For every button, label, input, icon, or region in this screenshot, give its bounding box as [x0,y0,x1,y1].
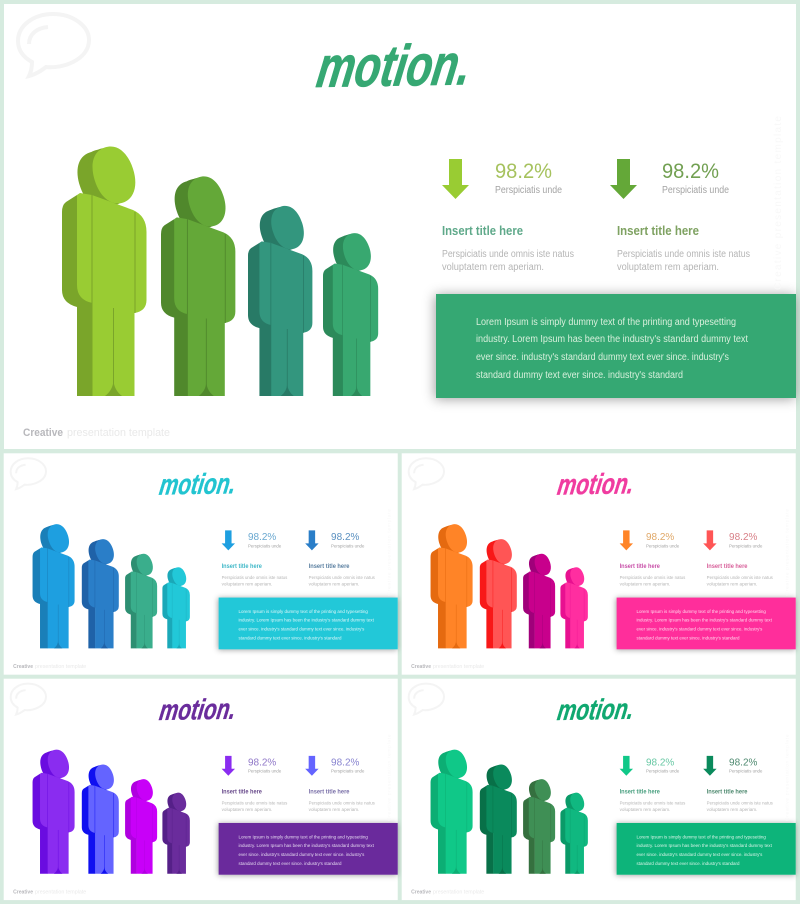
callout box: ever since. industry's standard dummy text ever since. industry's [476,352,729,363]
people figures [431,522,588,648]
vertical faint label: Creative presentation template [784,734,790,821]
stat 2: 98.2% [729,757,757,768]
icon: speech bubble [11,458,46,489]
footer [13,664,86,670]
callout box: industry. Lorem Ipsum has been the industry's standard dummy text [239,843,374,849]
text block 1: voluptatem rem aperiam. [222,582,272,588]
stat 1: Perspiciatis unde [646,543,680,549]
text block 2 [707,789,773,813]
stat 2: Perspiciatis unde [331,769,365,775]
footer: Creative [411,664,431,670]
text block 1: Perspiciatis unde omnis iste natus [620,801,686,807]
arrow 1 [222,530,235,550]
text block 2: Perspiciatis unde omnis iste natus [707,575,773,581]
panel: blue slide [4,453,398,675]
callout box [617,823,796,875]
footer: presentation template [433,664,484,670]
stat 2: Perspiciatis unde [729,543,763,549]
panel: pink and orange slide [402,453,796,675]
text block 2 [309,563,375,588]
text block 2: Perspiciatis unde omnis iste natus [309,575,375,581]
title: motion. [555,468,636,502]
text block 1: Perspiciatis unde omnis iste natus [222,801,288,807]
stat 2: 98.2% [331,757,359,768]
callout box: standard dummy text ever since. industry's standard [637,861,740,867]
stat 2: Perspiciatis unde [662,185,729,196]
callout box: ever since. industry's standard dummy text ever since. industry's [637,852,763,858]
callout box: standard dummy text ever since. industry's standard [239,635,342,641]
text block 2: Insert title here [707,563,748,570]
arrow 1 [442,159,469,199]
stat 2: Perspiciatis unde [331,543,365,549]
callout box [219,598,398,649]
text block 2 [309,789,375,813]
title: motion. [157,468,238,502]
stat 2: 98.2% [662,160,719,183]
stat 1 [248,532,282,549]
text block 1: Insert title here [222,563,262,570]
text block 1: Perspiciatis unde omnis iste natus [222,575,288,581]
footer [411,664,484,670]
arrow 2 [703,530,717,550]
callout box: industry. Lorem Ipsum has been the industry's standard dummy text [476,334,748,345]
stat 1: 98.2% [248,757,276,768]
callout box: industry. Lorem Ipsum has been the industry's standard dummy text [637,617,772,623]
text block 1: Insert title here [620,789,660,796]
callout box: Lorem Ipsum is simply dummy text of the printing and typesetting [239,834,368,840]
figure 4 [323,230,378,396]
footer [411,890,484,896]
callout box: standard dummy text ever since. industry's standard [476,370,683,381]
callout box: industry. Lorem Ipsum has been the industry's standard dummy text [239,617,374,623]
text block 2: voluptatem rem aperiam. [617,262,719,273]
stat 1: Perspiciatis unde [495,185,562,196]
people figures [431,747,588,874]
figure 1 [62,141,146,396]
arrow 1 [222,756,235,776]
vertical faint label: Creative presentation template [784,509,790,596]
text block 2: Perspiciatis unde omnis iste natus [309,801,375,807]
stat 1 [646,757,680,775]
text block 2: voluptatem rem aperiam. [707,807,757,813]
text block 1 [620,563,686,588]
arrow 1 [620,530,633,550]
icon: speech bubble [18,14,89,76]
stat 1: Perspiciatis unde [248,769,282,775]
callout box [617,598,796,649]
stat 2 [331,757,365,775]
stat 1: Perspiciatis unde [646,769,680,775]
stat 1: 98.2% [646,757,674,768]
callout box: standard dummy text ever since. industry's standard [637,635,740,641]
text block 2: voluptatem rem aperiam. [309,582,359,588]
callout box [219,823,398,875]
footer: presentation template [35,664,86,670]
people figures [33,747,190,874]
vertical faint label: Creative presentation template [386,509,392,596]
text block 2 [707,563,773,588]
stat 2 [331,532,365,549]
stat 1 [646,532,680,549]
title: motion. [157,694,238,727]
people figures [33,522,190,648]
callout box: Lorem Ipsum is simply dummy text of the printing and typesetting [476,317,736,328]
text block 1 [222,789,288,813]
text block 2: voluptatem rem aperiam. [309,807,359,813]
footer: Creative [13,664,33,670]
text block 2: voluptatem rem aperiam. [707,582,757,588]
text block 1: Perspiciatis unde omnis iste natus [620,575,686,581]
text block 1: Insert title here [442,223,523,238]
footer [13,890,86,896]
arrow 2 [610,159,637,199]
text block 1: Perspiciatis unde omnis iste natus [442,249,574,260]
footer: Creative [411,890,431,896]
text block 1 [442,223,574,273]
callout box: ever since. industry's standard dummy text ever since. industry's [239,852,365,858]
callout box [436,294,796,398]
arrow 2 [703,756,717,776]
panel: purple slide [4,679,398,900]
stat 2 [729,532,763,549]
text block 1: voluptatem rem aperiam. [442,262,544,273]
callout box: Lorem Ipsum is simply dummy text of the printing and typesetting [239,609,368,615]
footer: presentation template [67,427,170,439]
text block 1: Insert title here [620,563,660,570]
callout box: Lorem Ipsum is simply dummy text of the printing and typesetting [637,609,766,615]
stat 2: Perspiciatis unde [729,769,763,775]
footer [23,427,170,439]
vertical faint label: Creative presentation template [386,734,392,821]
title: motion. [313,33,476,100]
icon: speech bubble [11,684,46,715]
text block 1: voluptatem rem aperiam. [620,807,670,813]
arrow 2 [305,756,319,776]
vertical faint label: Creative presentation template [773,115,784,290]
arrow 1 [620,756,633,776]
stat 1: 98.2% [248,532,276,543]
stat 1: Perspiciatis unde [248,543,282,549]
callout box: ever since. industry's standard dummy text ever since. industry's [637,626,763,632]
callout box: industry. Lorem Ipsum has been the industry's standard dummy text [637,843,772,849]
panel: emerald slide [402,679,796,900]
callout box: Lorem Ipsum is simply dummy text of the printing and typesetting [637,834,766,840]
stat 2: 98.2% [331,532,359,543]
text block 2: Insert title here [617,223,699,238]
stat 1 [248,757,282,775]
stat 1 [495,160,562,196]
people figures [62,141,378,396]
text block 1: voluptatem rem aperiam. [222,807,272,813]
text block 1: voluptatem rem aperiam. [620,582,670,588]
text block 2 [617,223,750,273]
text block 2: Insert title here [707,789,748,796]
text block 2: Perspiciatis unde omnis iste natus [617,249,750,260]
stat 2: 98.2% [729,532,757,543]
footer: Creative [23,427,63,439]
title: motion. [555,694,636,727]
figure 2 [161,172,235,396]
panel: large green slide [4,4,796,449]
stat 1: 98.2% [495,160,552,183]
figure 3 [248,202,312,396]
text block 2: Perspiciatis unde omnis iste natus [707,801,773,807]
text block 2: Insert title here [309,789,350,796]
text block 1 [620,789,686,813]
text block 1: Insert title here [222,789,262,796]
icon: speech bubble [409,684,444,715]
callout box: standard dummy text ever since. industry's standard [239,861,342,867]
stat 2 [729,757,763,775]
stat 2 [662,160,729,196]
stat 1: 98.2% [646,532,674,543]
arrow 2 [305,530,319,550]
callout box: ever since. industry's standard dummy text ever since. industry's [239,626,365,632]
text block 2: Insert title here [309,563,350,570]
text block 1 [222,563,288,588]
footer: presentation template [433,890,484,896]
icon: speech bubble [409,458,444,489]
footer: Creative [13,890,33,896]
footer: presentation template [35,890,86,896]
